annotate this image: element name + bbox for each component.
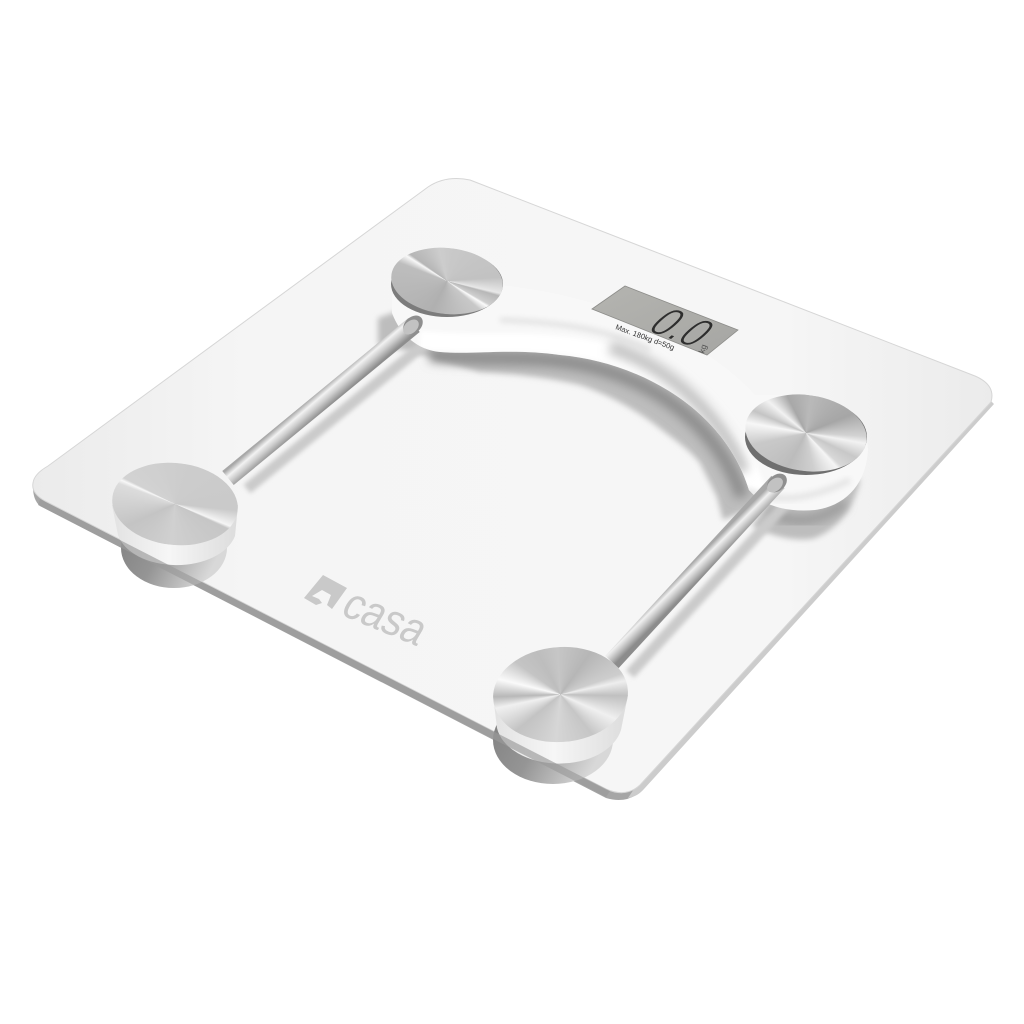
support rod: right: [612, 470, 791, 662]
display reading: 0.0: [637, 301, 727, 355]
shadow under the arch: [378, 312, 860, 540]
curved white arch housing: [392, 309, 862, 510]
casa logo: [304, 575, 437, 655]
glass platform: [33, 179, 994, 800]
digital display: [592, 286, 738, 355]
logo house mark: [304, 575, 347, 609]
rod reflections on glass: [247, 342, 792, 674]
glass front edge over the feet: [38, 499, 610, 797]
product illustration: glass bathroom scale: [32, 178, 994, 800]
support rod: left: [228, 312, 427, 478]
display panel: [592, 286, 738, 355]
foot: bottom right with rubber base: [490, 642, 631, 784]
foot: top left disc: [388, 242, 506, 320]
capacity label: Max. 180kg d=50g: [614, 322, 676, 352]
display unit: kg: [696, 343, 709, 355]
foot: right disc: [740, 387, 872, 479]
foot: bottom left with rubber base: [108, 457, 242, 588]
logo wordmark: casa: [334, 579, 437, 655]
